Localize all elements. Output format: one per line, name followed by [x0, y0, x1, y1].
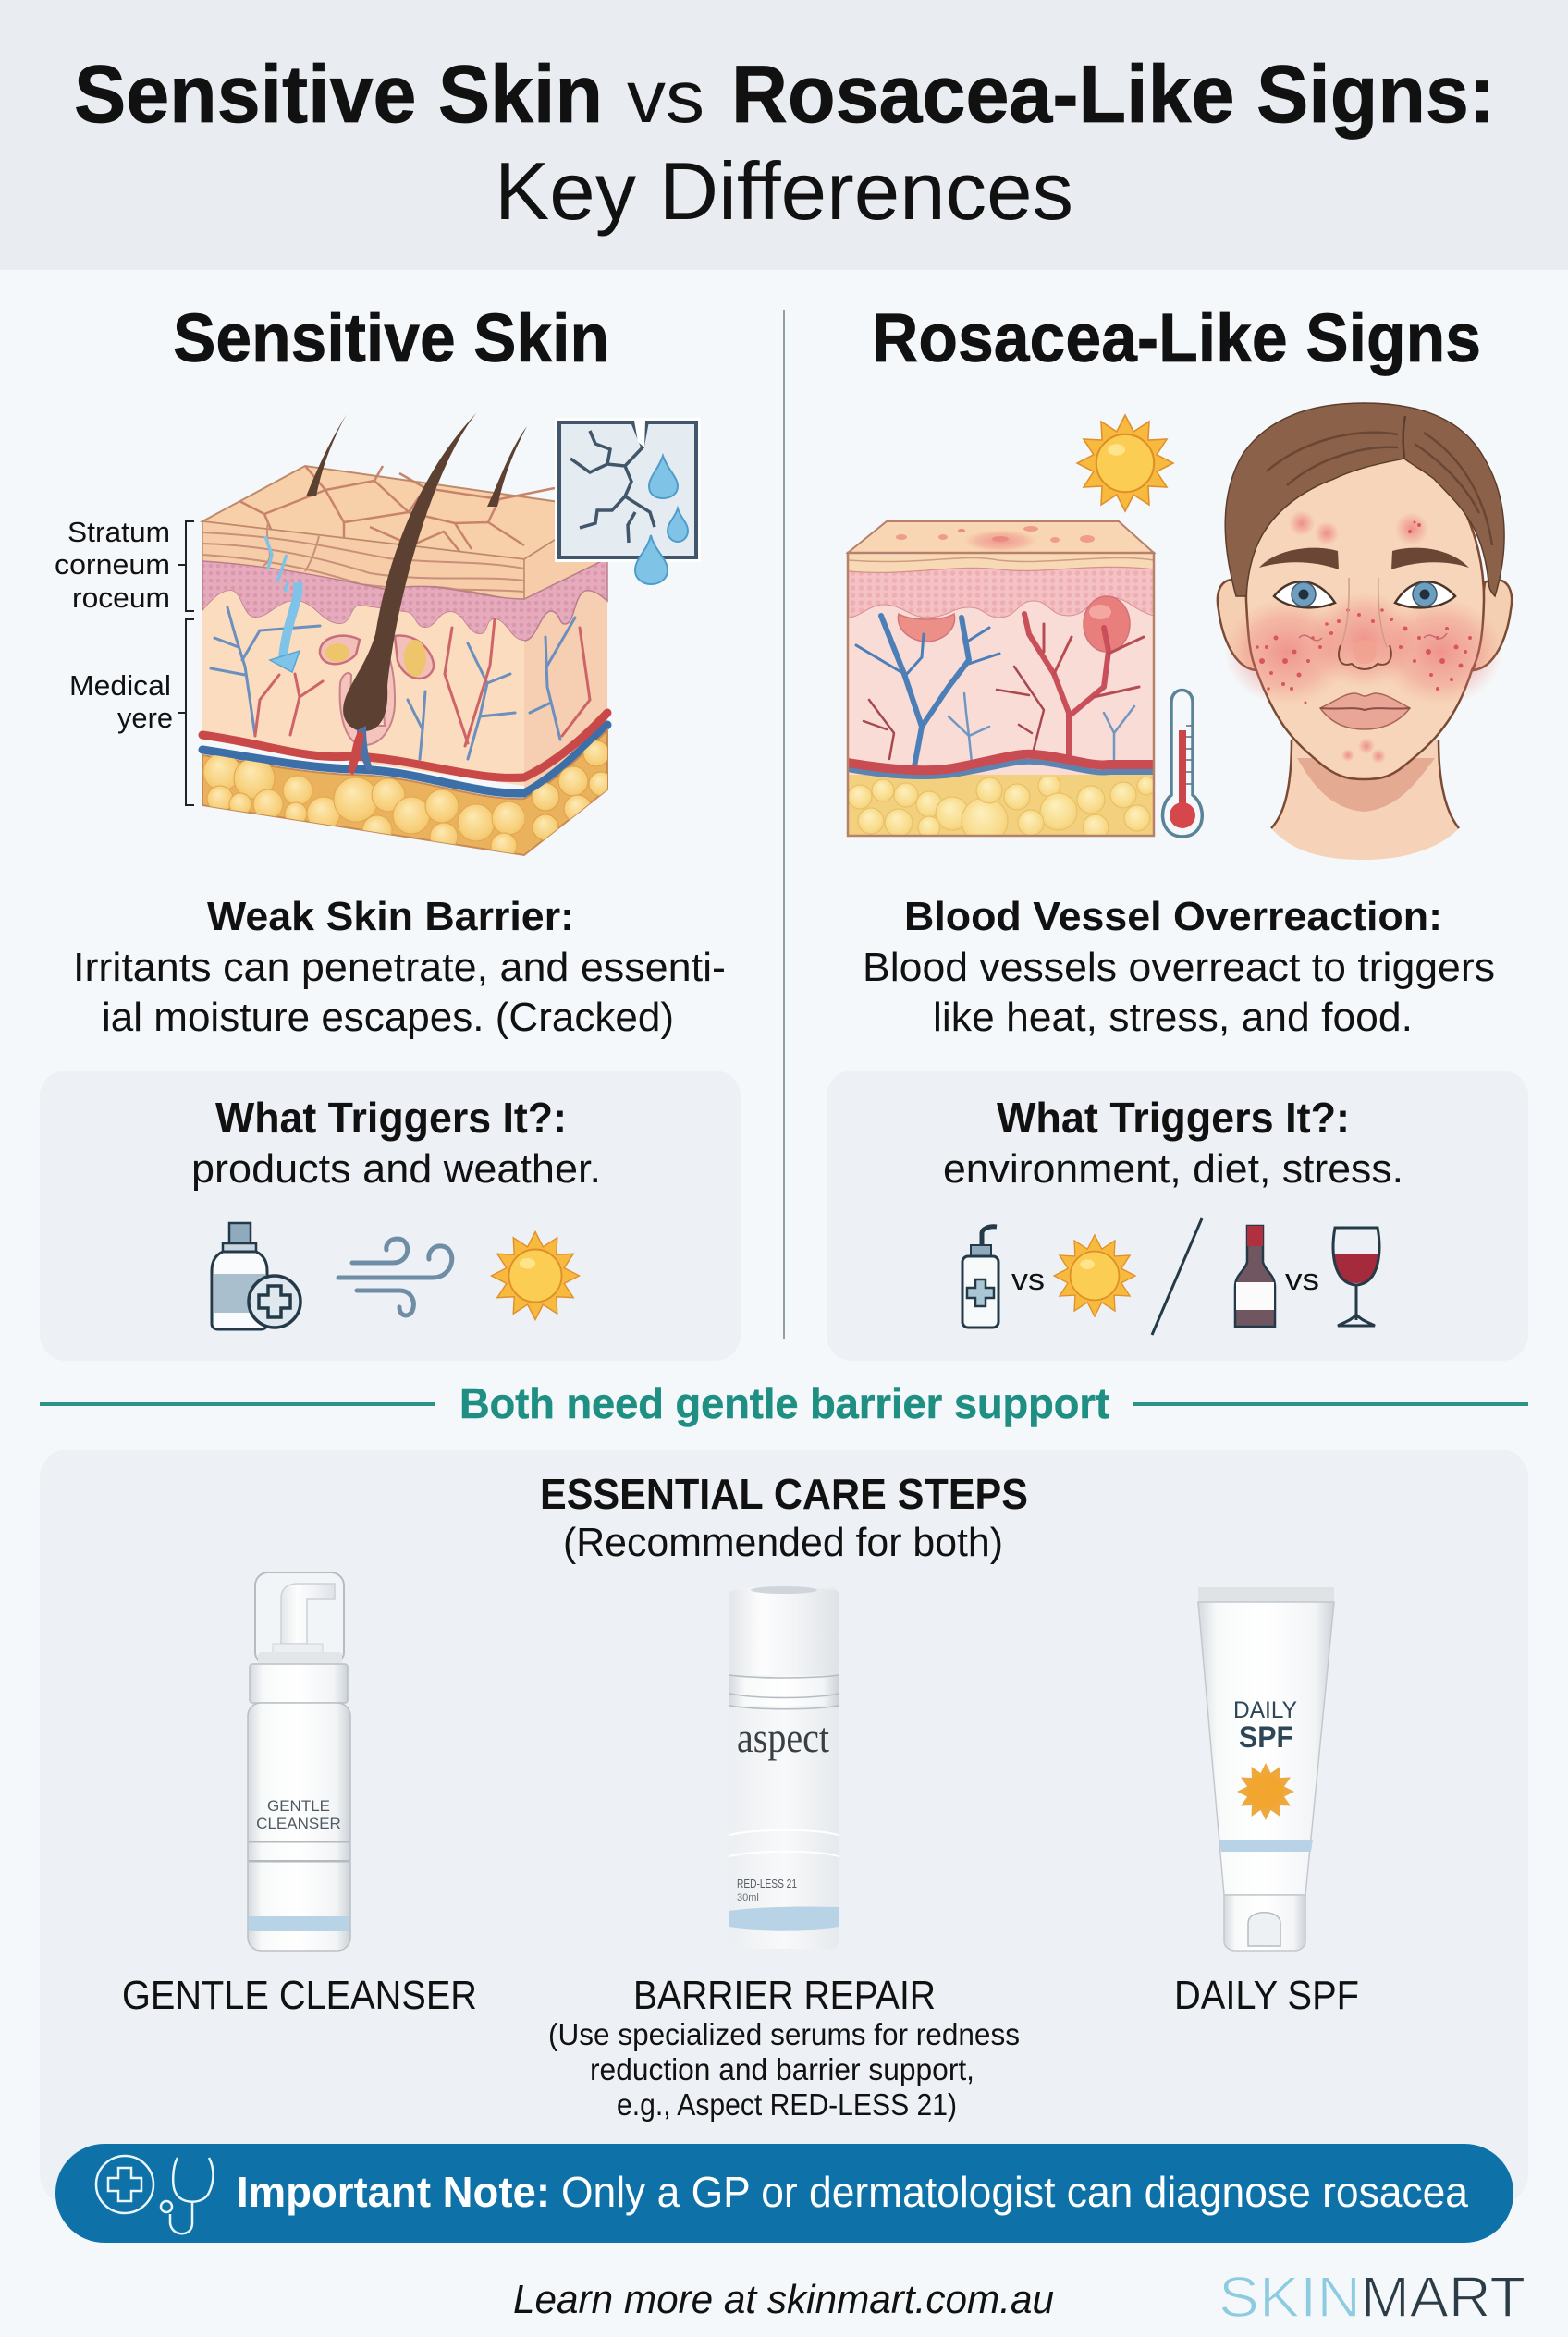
small hairs [306, 414, 527, 507]
title: Sensitive Skin [74, 48, 603, 140]
neck [1271, 740, 1459, 860]
note banner: Important Note: [237, 2168, 550, 2216]
icon: sun [1054, 1235, 1135, 1316]
corneum front layers [202, 521, 524, 601]
redness [1224, 510, 1503, 764]
face shape [1246, 434, 1484, 779]
panel: rosacea-like triggers [827, 1071, 1528, 1361]
divider: both need gentle barrier support [40, 1379, 1528, 1427]
main hair [343, 412, 477, 731]
icon: pump bottle [962, 1227, 998, 1328]
vessel band [848, 762, 1154, 777]
product: daily spf tube: SPF [1239, 1720, 1293, 1754]
top surface with cracked cells [202, 466, 605, 559]
care heading: ESSENTIAL CARE STEPS [540, 1470, 1028, 1518]
block body [848, 553, 1154, 836]
product: gentle cleanser: GENTLE [267, 1797, 330, 1815]
icon: wind [338, 1239, 452, 1315]
text block: blood vessel overreaction: like heat, stress, and food. [933, 995, 1413, 1040]
text block: blood vessel overreaction: Blood Vessel Overreaction: [904, 894, 1442, 939]
logo: SKINMART: MART [1361, 2266, 1525, 2330]
text block: weak skin barrier: ial moisture escapes. (Cracked) [102, 995, 674, 1040]
care heading [540, 1470, 1028, 1565]
label: barrier repair with details: reduction and barrier support, [590, 2052, 974, 2086]
inset: cracked barrier with moisture drops [559, 421, 696, 584]
icon: thermometer [1163, 690, 1202, 837]
heading: Rosacea-Like Signs: Rosacea-Like Signs [872, 300, 1481, 376]
divider: both need gentle barrier support: Both need gentle barrier support [459, 1379, 1109, 1427]
panel: essential care steps [40, 1450, 1528, 2203]
fat layer [849, 775, 1153, 835]
hair follicle sheath [340, 660, 395, 745]
title: Key Differences [495, 145, 1073, 237]
top surface with redness [848, 521, 1154, 553]
label: vs: vs [1285, 1263, 1319, 1296]
eyes [1274, 581, 1455, 607]
layer labels and brackets: roceum [72, 581, 170, 614]
panel: sensitive skin triggers [40, 1071, 741, 1361]
right face [524, 508, 607, 855]
label: vs: vs [1011, 1263, 1045, 1296]
product: aspect serum [729, 1586, 839, 1949]
product: daily spf tube: DAILY [1233, 1697, 1297, 1723]
text block: blood vessel overreaction [863, 894, 1495, 1040]
label: daily spf: DAILY SPF [1174, 1973, 1359, 2018]
product: aspect serum: aspect [737, 1714, 829, 1761]
footer link text: Learn more at skinmart.com.au [513, 2277, 1054, 2322]
layer labels and brackets: Stratum [67, 516, 170, 548]
icon: wine bottle [1235, 1226, 1275, 1327]
layer labels and brackets: corneum [55, 548, 170, 581]
icon: skincare bottle with plus [212, 1223, 300, 1329]
nose [1339, 578, 1391, 669]
label: gentle cleanser: GENTLE CLEANSER [122, 1973, 477, 2018]
icon: sun above skin block [1077, 415, 1173, 511]
product: aspect serum: 30ml [737, 1892, 759, 1903]
illustration: face with rosacea-like redness [1218, 403, 1512, 860]
note banner [55, 2144, 1513, 2243]
eyebrows [1259, 548, 1469, 569]
panel: sensitive skin triggers: products and weather. [191, 1146, 601, 1192]
product: aspect serum: RED-LESS 21 [737, 1877, 797, 1890]
fat layer [202, 730, 613, 859]
logo: SKINMART [1219, 2266, 1525, 2330]
product: gentle cleanser [248, 1572, 350, 1951]
epidermis [202, 558, 607, 641]
sebaceous glands [320, 636, 434, 679]
icon: sun [492, 1231, 579, 1320]
text block: weak skin barrier [73, 894, 726, 1040]
title: vs [627, 55, 704, 138]
icon: wine glass [1333, 1228, 1379, 1326]
label: barrier repair with details: (Use specialized serums for redness [548, 2017, 1020, 2051]
header band with title [0, 0, 1568, 270]
heading: Sensitive Skin: Sensitive Skin [173, 300, 609, 376]
layer labels and brackets: yere [117, 702, 173, 734]
layer labels and brackets [55, 516, 194, 805]
ears [1218, 580, 1256, 670]
note banner: Only a GP or dermatologist can diagnose rosacea [561, 2168, 1468, 2216]
blood vessels [211, 607, 590, 759]
care heading: (Recommended for both) [563, 1520, 1003, 1565]
vessels [856, 614, 1144, 766]
illustration: reactive skin block [848, 521, 1156, 844]
slash divider [1152, 1218, 1202, 1335]
title: Rosacea-Like Signs: [731, 48, 1495, 140]
epidermis [848, 567, 1154, 618]
product: daily spf tube [1198, 1587, 1334, 1951]
logo: SKINMART: SKIN [1219, 2266, 1361, 2330]
label: barrier repair with details [548, 1973, 1020, 2122]
vessel bands [202, 713, 607, 793]
layer labels and brackets: Medical [69, 669, 171, 702]
product: gentle cleanser: CLEANSER [256, 1815, 341, 1832]
penetrating irritant arrow [265, 536, 300, 672]
text block: blood vessel overreaction: Blood vessels overreact to triggers [863, 945, 1495, 990]
title [74, 48, 1495, 237]
label: barrier repair with details: e.g., Aspect RED-LESS 21) [617, 2087, 957, 2122]
text block: weak skin barrier: Weak Skin Barrier: [207, 894, 574, 939]
lips [1320, 693, 1410, 729]
illustration: cross-section of sensitive skin [202, 412, 613, 859]
panel: rosacea-like triggers: environment, diet, stress. [943, 1146, 1403, 1192]
hair [1225, 403, 1504, 596]
label: barrier repair with details: BARRIER REPAIR [633, 1973, 936, 2018]
text block: weak skin barrier: Irritants can penetrate, and essenti- [73, 945, 726, 990]
icon: medical cross and stethoscope [96, 2156, 213, 2233]
dermis [202, 591, 524, 786]
outer layers [848, 550, 1154, 573]
panel: sensitive skin triggers: What Triggers It?: [215, 1094, 567, 1142]
glands [898, 614, 955, 642]
panel: rosacea-like triggers: What Triggers It?: [997, 1094, 1350, 1142]
